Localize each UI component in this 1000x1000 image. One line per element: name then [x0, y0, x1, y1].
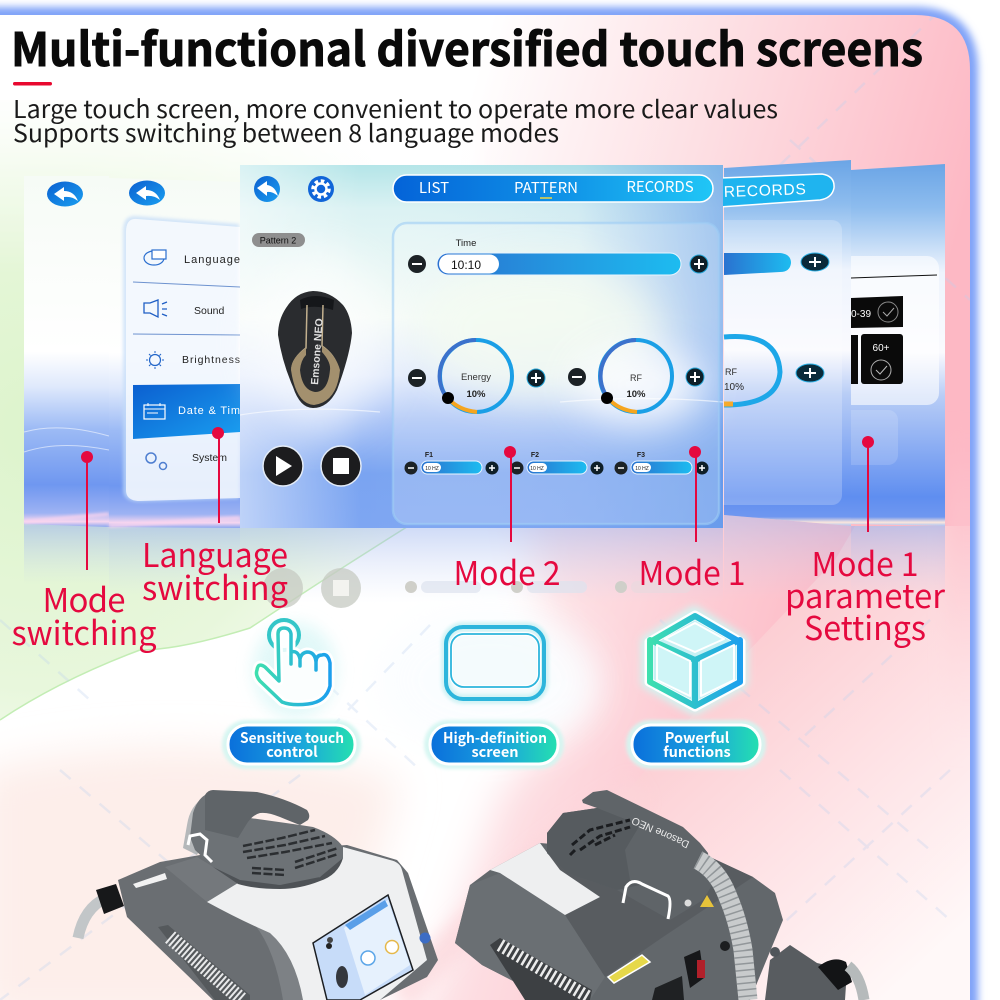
panel: mode 1 screen (right) [700, 160, 851, 526]
pink diagonal sweep [650, 526, 970, 1000]
time slider: 10:10 [451, 258, 481, 272]
tag: powerful functions [626, 720, 766, 769]
menu row: date and time selected [133, 384, 240, 439]
label: mode switching: switching [12, 607, 157, 655]
callout line: mode switching [81, 451, 93, 570]
callout line: mode 2 [504, 446, 516, 542]
F1 slider [404, 452, 498, 474]
subtitle text [13, 91, 778, 150]
label: language switching: switching [142, 562, 288, 610]
power socket and switch [652, 941, 730, 1000]
tab bar: PATTERN [514, 177, 578, 198]
screen [313, 895, 413, 1000]
handpiece image [278, 291, 352, 408]
icon: screen [446, 627, 544, 699]
handpiece [547, 790, 712, 920]
tag: high-definition screen: High-definition [443, 727, 547, 748]
F3 slider: F3 [637, 452, 645, 459]
tab bar: LIST [419, 177, 449, 198]
menu row: brightness: Brightness [182, 354, 240, 366]
icon: settings gear [308, 176, 334, 202]
handpiece image: Emsone NEO [309, 318, 326, 385]
top surface [500, 850, 753, 977]
white panel [490, 843, 600, 915]
label: mode 1 parameter settings: Mode 1 [812, 538, 918, 586]
RF dial: RF [630, 373, 642, 383]
icon: cube [648, 613, 741, 708]
hose [78, 898, 106, 938]
panel: main pattern screen [240, 165, 723, 528]
label: language switching [142, 529, 288, 610]
F2 slider [510, 452, 604, 474]
F1 slider: F1 [425, 452, 433, 459]
green wave [0, 136, 385, 719]
tag: high-definition screen [424, 720, 564, 769]
tag: sensitive touch control [222, 720, 361, 769]
menu row: system: System [192, 452, 227, 464]
menu row: brightness [146, 351, 240, 369]
label sticker [133, 873, 167, 888]
menu row: sound: Sound [194, 305, 225, 317]
RF dial [724, 336, 780, 405]
tab bar [393, 175, 713, 202]
F3 slider: 10 HZ [635, 466, 649, 472]
callout line: parameter settings [862, 436, 874, 532]
light centre wash [353, 528, 572, 1000]
play button [263, 446, 303, 486]
subtitle text: Large touch screen, more convenient to operate more clear values [13, 91, 778, 126]
age option: 60+: 60+ [873, 343, 890, 354]
icon: touch hand [253, 620, 337, 718]
F1 slider: 10 HZ [425, 466, 439, 472]
tag: sensitive touch control: Sensitive touch [240, 727, 344, 748]
reflections of the screens [24, 515, 945, 608]
label: mode 1 parameter settings [785, 538, 945, 650]
pattern badge [252, 233, 305, 247]
white bracket [623, 882, 670, 919]
callout line: language switching [212, 427, 224, 523]
white bracket [188, 834, 212, 862]
device: rear view machine [455, 790, 864, 1000]
menu row: language: Language [184, 254, 240, 266]
tag: powerful functions: functions [663, 741, 731, 762]
handpiece shell [190, 795, 343, 885]
panel: mode 1 parameter settings screen (far right) [840, 164, 945, 526]
tag: powerful functions: Powerful [665, 727, 730, 748]
RF dial [568, 340, 704, 412]
icon: back arrow [254, 176, 280, 202]
label: mode 2: Mode 2 [454, 547, 560, 595]
machine left face [455, 873, 605, 1000]
hose [698, 860, 748, 1000]
records tab [720, 174, 834, 207]
icon: back arrow [47, 182, 83, 206]
warning sticker [608, 955, 650, 983]
machine front bevel [255, 925, 303, 1000]
panel: language switching screen [109, 178, 240, 528]
menu row: language [144, 250, 240, 266]
tag: sensitive touch control: control [266, 741, 318, 762]
records tab: RECORDS [724, 181, 806, 201]
time slider [408, 238, 708, 275]
machine top dark surface [165, 857, 240, 902]
F2 slider: 10 HZ [530, 466, 544, 472]
device: front view machine [78, 790, 438, 1000]
white top panel [207, 847, 427, 1000]
machine vent [158, 925, 250, 1000]
bottom-left pale blush [0, 747, 400, 1000]
device: rear view machine: Dasone NEO [630, 814, 691, 850]
title: Multi-functional diversified touch screens [11, 14, 923, 80]
F3 slider [614, 452, 708, 474]
age option: 30-39: 0-39 [851, 309, 871, 320]
pink right strip blend [948, 518, 970, 590]
energy dial: Energy [461, 372, 491, 383]
menu row: date and time selected: Date & Tim [178, 405, 240, 417]
subtitle text: Supports switching between 8 language modes [13, 115, 559, 150]
F2 slider: F2 [531, 452, 539, 459]
machine silhouette [118, 845, 438, 1000]
RF dial: 10% [724, 382, 744, 393]
stop button [321, 446, 361, 486]
handpiece ribbed back [183, 797, 210, 855]
panel: mode switching screen [24, 176, 109, 527]
label: mode switching: Mode [42, 574, 126, 622]
top white fade over green [0, 100, 280, 232]
label: mode 1 parameter settings: parameter [785, 570, 945, 618]
RF dial: RF [725, 367, 737, 377]
machine silhouette [455, 843, 783, 1000]
title accent line [13, 82, 52, 86]
energy dial [408, 340, 545, 412]
handle [205, 790, 309, 838]
energy dial: 10% [466, 389, 486, 400]
pattern badge: Pattern 2 [260, 236, 296, 246]
RF dial: 10% [626, 389, 646, 400]
time slider end [724, 253, 791, 275]
menu row: sound [144, 300, 225, 317]
tag: high-definition screen: screen [471, 741, 519, 762]
menu row: system [146, 452, 227, 470]
label: mode 1 parameter settings: Settings [804, 602, 926, 650]
icon: back arrow [129, 180, 165, 206]
machine vent [500, 945, 590, 998]
label: mode switching [12, 574, 157, 655]
tab bar: RECORDS [626, 176, 694, 197]
callout line: mode 1 [689, 446, 701, 542]
settings list card [123, 216, 240, 502]
age option: 60+ [861, 334, 903, 384]
label: language switching: Language [142, 529, 288, 577]
time slider: Time [456, 238, 476, 249]
rear connector [765, 945, 847, 1000]
age option: 30-39 [851, 296, 903, 328]
vents [243, 830, 338, 875]
parameter card [393, 223, 719, 524]
label: mode 1: Mode 1 [638, 547, 746, 595]
